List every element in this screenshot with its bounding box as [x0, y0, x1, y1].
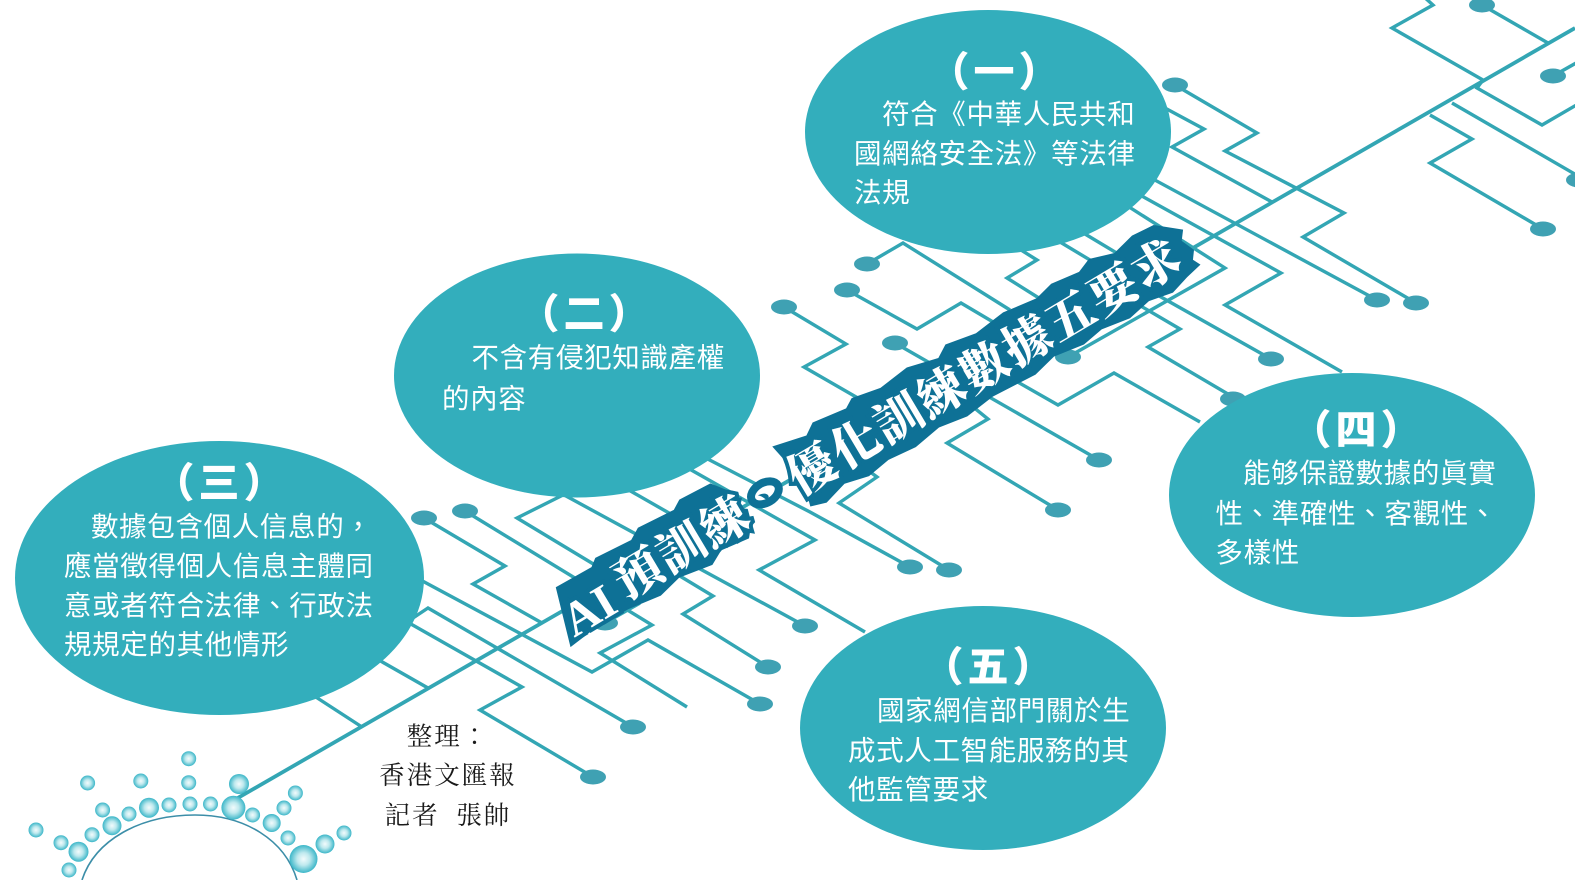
title text: AI: [553, 575, 626, 647]
main trunk line: [236, 28, 1575, 799]
banner background left: [534, 472, 763, 649]
text block: requirement three: [64, 511, 374, 660]
text block: requirement five: 成式人工智能服務的其: [848, 735, 1130, 766]
title text: 優化訓練數據五要求: [779, 229, 1193, 505]
credit text: 整理：: [407, 722, 489, 751]
traces upper right: [1000, 0, 1583, 422]
text block: requirement one: 國網絡安全法》等法律: [854, 138, 1136, 169]
text block: requirement one: 法規: [854, 177, 910, 208]
text block: requirement five: 他監管要求: [848, 774, 989, 805]
text block: requirement two: 不含有侵犯知識產權: [472, 342, 725, 373]
panel: requirement two: [394, 254, 760, 498]
title text: [549, 229, 1196, 647]
text block: requirement three: 數據包含個人信息的，: [91, 511, 372, 542]
panel: requirement five: [800, 606, 1166, 850]
heading: five: （五）: [922, 644, 1058, 690]
text block: requirement one: [854, 98, 1136, 208]
heading: one: （一）: [928, 49, 1064, 95]
heading: four: （四）: [1290, 407, 1426, 453]
text block: requirement four: 多樣性: [1216, 537, 1300, 568]
text block: requirement three: 意或者符合法律、行政法: [64, 590, 374, 621]
arc: [82, 815, 297, 880]
traces centre: [517, 243, 1099, 667]
panel: requirement one: [805, 10, 1171, 254]
banner background right: [772, 208, 1210, 512]
credit text: 記者 張帥: [385, 801, 511, 830]
heading: three: （三）: [154, 460, 288, 506]
text block: requirement three: 應當徵得個人信息主體同: [64, 550, 374, 582]
text block: requirement four: 能够保證數據的眞實: [1243, 458, 1496, 488]
ring separator: [747, 477, 783, 509]
text block: requirement four: [1216, 458, 1497, 568]
text block: requirement three: 規規定的其他情形: [64, 629, 289, 660]
bubble crown graphic: [28, 751, 352, 880]
text block: requirement two: [442, 342, 725, 414]
text block: requirement five: [848, 695, 1130, 805]
circuit traces network: [236, 0, 1583, 799]
panel: requirement three: [15, 441, 424, 715]
text block: requirement two: 的內容: [442, 383, 526, 414]
text block: requirement five: 國家網信部門關於生: [877, 695, 1130, 726]
text block: requirement four: 性、準確性、客觀性、: [1216, 498, 1497, 529]
title banner: [534, 207, 1210, 653]
heading: two: （二）: [518, 291, 654, 337]
traces lower left: [305, 511, 760, 777]
text block: requirement one: 符合《中華人民共和: [882, 98, 1135, 130]
panel: requirement four: [1169, 373, 1535, 617]
title text: 、: [747, 463, 789, 506]
title text: 預訓練: [605, 487, 761, 609]
credit text: 香港文匯報: [379, 761, 517, 790]
terminal dots: [411, 0, 1583, 784]
credit text: [379, 722, 517, 830]
bubbles: [28, 751, 352, 878]
